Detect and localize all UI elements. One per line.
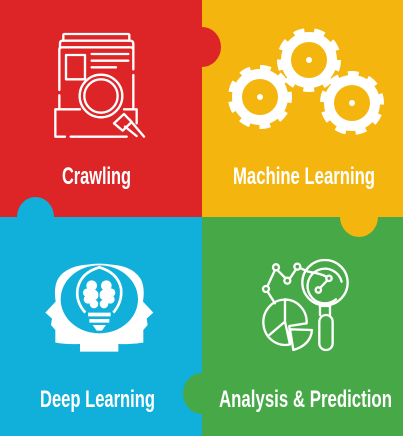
puzzle knob: yellow into green <box>340 217 378 237</box>
icon: two heads with brain bulb <box>45 264 153 352</box>
gear: right <box>323 74 381 132</box>
label: Deep Learning: Deep Learning <box>40 386 155 413</box>
panel: analysis and prediction <box>202 217 403 436</box>
icon: charts with magnifying glass <box>263 260 348 350</box>
puzzle knob: blue into red <box>17 197 54 217</box>
gear: top <box>280 31 338 89</box>
panel: crawling <box>0 0 202 217</box>
panel: deep learning <box>0 217 202 436</box>
label: Crawling: Crawling <box>62 163 131 190</box>
gear: left <box>231 68 289 126</box>
panel: machine learning <box>202 0 403 217</box>
puzzle knob: red into yellow <box>202 27 221 67</box>
icon: three gears <box>231 31 381 132</box>
icon: documents with magnifying glass <box>55 34 144 137</box>
brain <box>83 280 115 308</box>
puzzle knob: green into blue <box>183 373 202 414</box>
